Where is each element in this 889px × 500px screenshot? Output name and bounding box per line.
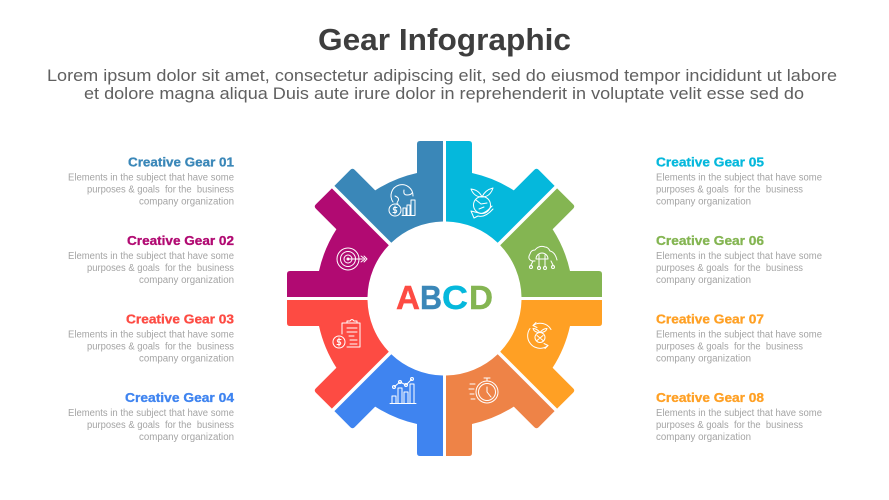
text block: Creative Gear 08: purposes & goals for the business (656, 420, 803, 431)
text block: Creative Gear 07: Elements in the subject that have some (656, 330, 822, 340)
text block: Creative Gear 08 (656, 390, 822, 443)
icon: clipboard with dollar coin (333, 320, 360, 348)
text block: Creative Gear 02: Creative Gear 02 (127, 233, 234, 248)
center label: ABCD (396, 279, 493, 316)
text block: Creative Gear 03: Creative Gear 03 (126, 312, 234, 326)
text block: Creative Gear 07: company organization (656, 354, 751, 364)
text block: Creative Gear 07 (656, 312, 822, 364)
center label: ABCD: C (442, 279, 468, 316)
text block: Creative Gear 07: Creative Gear 07 (656, 312, 764, 326)
text block: Creative Gear 06: purposes & goals for the business (656, 263, 803, 274)
text block: Creative Gear 01: Creative Gear 01 (128, 154, 234, 170)
text block: Creative Gear 01: purposes & goals for the business (87, 184, 234, 196)
text block: Creative Gear 04: company organization (139, 432, 234, 443)
icon: globe with dollar and bars (389, 185, 415, 216)
icon: circular arrows with plant (528, 322, 551, 348)
gear segment 08 (446, 354, 555, 456)
text block: Creative Gear 02: purposes & goals for the business (87, 263, 234, 274)
text block: Creative Gear 08: company organization (656, 432, 751, 443)
icon: cloud network (529, 246, 557, 270)
text block: Creative Gear 03: company organization (139, 354, 234, 364)
subtitle (47, 66, 837, 103)
text block: Creative Gear 04 (68, 390, 235, 443)
text block: Creative Gear 03 (68, 312, 234, 364)
center label: ABCD: A (396, 279, 420, 316)
subtitle: et dolore magna aliqua Duis aute irure dolor in reprehenderit in voluptate velit esse sed do (84, 84, 804, 103)
gear segment 06 (500, 188, 602, 297)
center label: ABCD: B (420, 279, 442, 316)
text block: Creative Gear 06: company organization (656, 275, 751, 286)
center label: ABCD: D (469, 279, 493, 316)
gear segment 01 (334, 141, 443, 243)
gear segment 03 (287, 300, 389, 409)
text block: Creative Gear 03: Elements in the subject that have some (68, 330, 234, 340)
gear diagram (287, 141, 602, 456)
text block: Creative Gear 06 (656, 233, 822, 286)
text block: Creative Gear 04: purposes & goals for the business (87, 420, 234, 431)
text block: Creative Gear 02: Elements in the subject that have some (68, 251, 234, 262)
text block: Creative Gear 03: purposes & goals for the business (87, 342, 234, 352)
text block: Creative Gear 08: Creative Gear 08 (656, 390, 764, 405)
icon: target with arrow (337, 248, 367, 270)
gear segment 07 (500, 300, 602, 409)
text block: Creative Gear 05: purposes & goals for the business (656, 184, 803, 196)
text block: Creative Gear 04: Elements in the subject that have some (68, 408, 234, 419)
text block: Creative Gear 08: Elements in the subject that have some (656, 408, 822, 419)
icon: bar chart with trend line (390, 378, 416, 404)
text block: Creative Gear 05 (656, 154, 822, 208)
text block: Creative Gear 06: Creative Gear 06 (656, 233, 764, 248)
text block: Creative Gear 02 (68, 233, 234, 286)
text block: Creative Gear 01: company organization (139, 196, 234, 208)
icon: stopwatch with speed lines (469, 378, 498, 403)
text block: Creative Gear 02: company organization (139, 275, 234, 286)
subtitle: Lorem ipsum dolor sit amet, consectetur adipiscing elit, sed do eiusmod tempor incididunt ut labore (47, 66, 837, 85)
text block: Creative Gear 07: purposes & goals for the business (656, 342, 803, 352)
title: Gear Infographic (318, 22, 571, 57)
gear segment 02 (287, 188, 389, 297)
text block: Creative Gear 05: company organization (656, 196, 751, 208)
text block: Creative Gear 04: Creative Gear 04 (125, 390, 235, 405)
text block: Creative Gear 01 (68, 154, 234, 208)
gear segment 05 (446, 141, 555, 243)
gear segment 04 (334, 354, 443, 456)
text block: Creative Gear 06: Elements in the subject that have some (656, 251, 822, 262)
icon: globe plant in hand (471, 188, 493, 218)
text block: Creative Gear 05: Creative Gear 05 (656, 154, 764, 170)
text block: Creative Gear 01: Elements in the subject that have some (68, 172, 234, 184)
text block: Creative Gear 05: Elements in the subject that have some (656, 172, 822, 184)
